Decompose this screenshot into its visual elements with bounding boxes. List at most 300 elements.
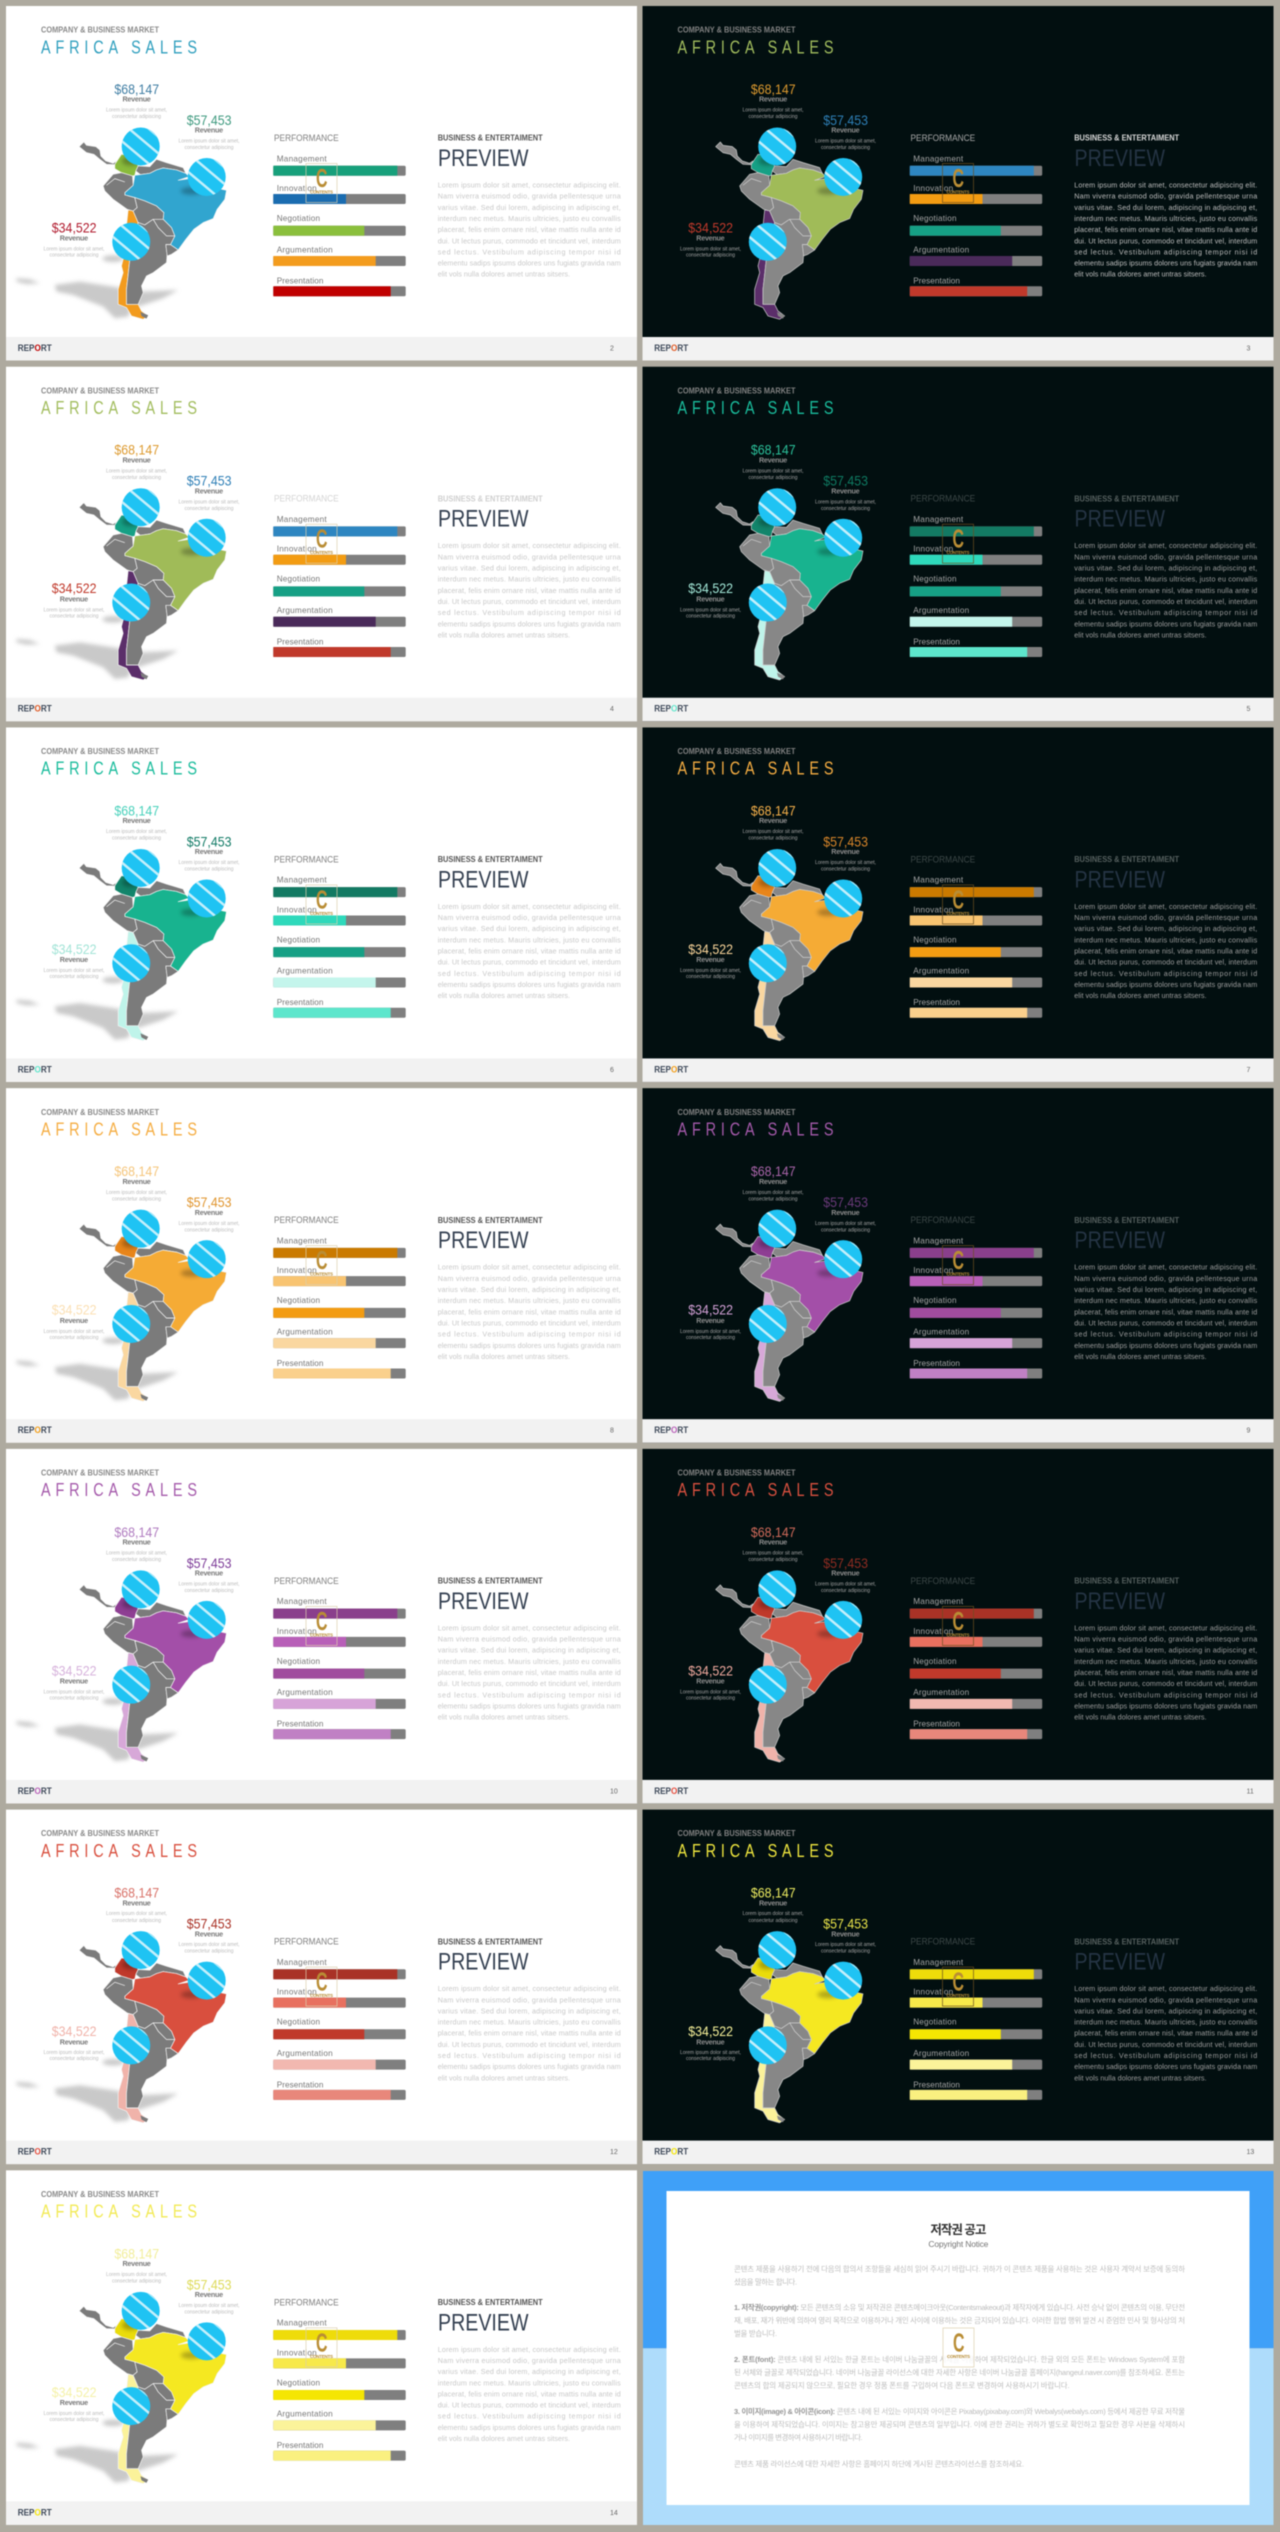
body text: varius vitae. Sed dui lorem, adipiscing in adipiscing et, <box>1074 924 1257 933</box>
stat 68,147: $68,147 <box>114 81 159 97</box>
white card <box>666 2191 1250 2505</box>
bar chart: Argumentation <box>277 2049 333 2058</box>
bar chart <box>273 154 406 296</box>
stat 57,453: Lorem ipsum dolor sit amet, <box>178 860 240 866</box>
stat 34,522: Lorem ipsum dolor sit amet, <box>680 2050 741 2056</box>
stat 68,147: Lorem ipsum dolor sit amet, <box>742 1911 804 1917</box>
copyright subtitle: Copyright Notice <box>928 2239 989 2249</box>
stat 57,453: $57,453 <box>187 1194 232 1210</box>
title: AFRICA SALES <box>41 2201 197 2222</box>
section heading: BUSINESS & ENTERTAIMENT <box>1074 133 1179 143</box>
stat 57,453 <box>815 1555 876 1594</box>
body text: varius vitae. Sed dui lorem, adipiscing in adipiscing et, <box>438 564 621 573</box>
body text: varius vitae. Sed dui lorem, adipiscing in adipiscing et, <box>438 2367 621 2376</box>
body text: sed lectus. Vestibulum adipiscing tempor nisi id <box>438 969 621 978</box>
stat 34,522: $34,522 <box>52 220 97 236</box>
stat 57,453: Lorem ipsum dolor sit amet, <box>815 1221 876 1227</box>
watermark <box>942 1245 974 1285</box>
bar chart: Innovation <box>277 2348 317 2357</box>
stat 34,522: consectetur adipiscing <box>50 2056 99 2062</box>
body text: sed lectus. Vestibulum adipiscing tempor nisi id <box>438 2412 621 2421</box>
stat 57,453: Revenue <box>195 847 223 856</box>
stat 34,522: Revenue <box>60 2037 88 2046</box>
watermark: C <box>952 163 964 193</box>
map shadow <box>16 616 178 679</box>
body text: dui. Ut lectus purus, commodo et tincidunt vel, interdum <box>438 2401 621 2410</box>
footer text <box>18 703 614 714</box>
body text: elit vols nulla dolores amet untras sitsers. <box>438 1713 570 1722</box>
bar chart: Innovation <box>277 1627 317 1636</box>
bar chart: Management <box>277 2319 327 2328</box>
preview heading: PREVIEW <box>1074 1588 1165 1615</box>
kicker: COMPANY & BUSINESS MARKET <box>678 385 796 395</box>
footer text: REPORT <box>18 2507 52 2517</box>
stat 57,453: $57,453 <box>823 473 868 489</box>
body text: elit vols nulla dolores amet untras sitsers. <box>438 270 570 279</box>
watermark: CONTENTS <box>310 190 333 194</box>
bar chart: Negotiation <box>277 575 320 584</box>
stat 68,147: Lorem ipsum dolor sit amet, <box>742 108 804 114</box>
body text: placerat, felis enim ornare nisl, vitae mattis nulla ante id <box>1074 586 1257 595</box>
bar chart: Innovation <box>913 545 954 554</box>
stat 57,453 <box>815 112 876 151</box>
body text: Lorem ipsum dolor sit amet, consectetur adipiscing elit. <box>438 902 621 911</box>
title: AFRICA SALES <box>677 1119 833 1140</box>
bar chart: Management <box>913 1958 964 1967</box>
body text: dui. Ut lectus purus, commodo et tincidunt vel, interdum <box>438 236 621 245</box>
title: AFRICA SALES <box>41 1840 197 1861</box>
bar chart <box>273 1236 406 1378</box>
body text: varius vitae. Sed dui lorem, adipiscing in adipiscing et, <box>1074 203 1257 212</box>
body text: sed lectus. Vestibulum adipiscing tempor nisi id <box>438 608 621 617</box>
body text: elit vols nulla dolores amet untras sitsers. <box>438 630 570 639</box>
body text: Lorem ipsum dolor sit amet, consectetur adipiscing elit. <box>438 1263 621 1272</box>
body text: interdum nec metus. Mauris ultricies, justo eu convallis <box>1074 214 1258 223</box>
footer text <box>654 1425 1250 1435</box>
marker circles <box>743 462 868 651</box>
stat 34,522: Revenue <box>696 594 725 603</box>
body text: varius vitae. Sed dui lorem, adipiscing in adipiscing et, <box>438 1646 621 1655</box>
footer bar <box>6 1780 637 1803</box>
watermark: CONTENTS <box>946 190 970 194</box>
stat 57,453 <box>178 1194 240 1233</box>
body text: varius vitae. Sed dui lorem, adipiscing in adipiscing et, <box>1074 1646 1257 1655</box>
bar chart: Management <box>913 1236 964 1245</box>
stat 34,522 <box>44 2384 104 2423</box>
footer text: 8 <box>610 1428 614 1435</box>
title: AFRICA SALES <box>41 397 197 418</box>
body text: interdum nec metus. Mauris ultricies, justo eu convallis <box>438 1296 621 1305</box>
stat 34,522: $34,522 <box>52 581 97 596</box>
watermark: CONTENTS <box>946 550 970 555</box>
body text: Nam viverra euismod odio, gravida pellentesque urna <box>438 192 621 201</box>
body text: Lorem ipsum dolor sit amet, consectetur adipiscing elit. <box>438 1623 621 1632</box>
body text: varius vitae. Sed dui lorem, adipiscing in adipiscing et, <box>438 2006 621 2015</box>
footer text: REPORT <box>18 1064 52 1075</box>
stat 68,147: consectetur adipiscing <box>112 2279 161 2285</box>
bar chart: Negotiation <box>913 214 957 223</box>
stat 57,453: $57,453 <box>823 834 868 850</box>
performance heading: PERFORMANCE <box>274 854 339 864</box>
stat 57,453: Lorem ipsum dolor sit amet, <box>178 139 240 145</box>
watermark: C <box>316 1967 328 1997</box>
stat 57,453: Revenue <box>831 486 860 495</box>
stat 68,147: $68,147 <box>751 1885 796 1901</box>
bar chart: Innovation <box>913 184 954 193</box>
bar chart: Negotiation <box>277 2378 320 2387</box>
watermark: CONTENTS <box>946 1632 970 1637</box>
body text: elit vols nulla dolores amet untras sitsers. <box>1074 2073 1206 2082</box>
bar chart <box>273 1958 406 2100</box>
kicker: COMPANY & BUSINESS MARKET <box>678 1467 796 1477</box>
stat 34,522: $34,522 <box>52 1302 97 1318</box>
stat 34,522: Lorem ipsum dolor sit amet, <box>680 247 741 253</box>
stat 68,147: Lorem ipsum dolor sit amet, <box>742 468 804 474</box>
body text: Lorem ipsum dolor sit amet, consectetur adipiscing elit. <box>438 541 621 550</box>
performance heading: PERFORMANCE <box>910 854 975 864</box>
footer text: 6 <box>610 1067 614 1074</box>
stat 34,522: Lorem ipsum dolor sit amet, <box>44 1689 104 1695</box>
body text: sed lectus. Vestibulum adipiscing tempor nisi id <box>1074 2051 1257 2060</box>
stat 34,522: Revenue <box>60 594 88 603</box>
body text: dui. Ut lectus purus, commodo et tincidunt vel, interdum <box>438 597 621 606</box>
bar chart <box>910 515 1042 657</box>
body text: placerat, felis enim ornare nisl, vitae mattis nulla ante id <box>438 2389 621 2398</box>
body text: elementu sadips ipsums dolores uns fugiats gravida nam <box>438 1341 621 1350</box>
marker circles <box>106 2266 232 2454</box>
stat 57,453: $57,453 <box>187 2277 232 2292</box>
stat 34,522: consectetur adipiscing <box>686 2056 735 2062</box>
watermark: CONTENTS <box>947 2354 970 2359</box>
stat 68,147: consectetur adipiscing <box>748 114 798 120</box>
clause 1: 재, 배포, 재가 위반에 의하여 영리 목적으로 이용하거나 개인 사이에 이용하는 것은 금지되어 있습니다. 이러한 합법 행위 발견 시 준엄한 민사 및 형사상의 처 <box>734 2316 1185 2325</box>
map <box>716 503 863 680</box>
stat 68,147: Lorem ipsum dolor sit amet, <box>742 829 804 835</box>
bar chart: Negotiation <box>913 2018 957 2027</box>
map <box>79 1224 226 1401</box>
stat 57,453: Lorem ipsum dolor sit amet, <box>815 860 876 866</box>
bar chart: Innovation <box>277 545 317 554</box>
stat 68,147 <box>106 1163 167 1202</box>
stat 57,453: $57,453 <box>823 1194 868 1210</box>
stat 34,522: Lorem ipsum dolor sit amet, <box>44 2411 104 2417</box>
bar chart: Negotiation <box>913 575 957 584</box>
body text: sed lectus. Vestibulum adipiscing tempor nisi id <box>1074 247 1257 256</box>
watermark: CONTENTS <box>310 1632 333 1637</box>
title: AFRICA SALES <box>677 397 833 418</box>
body text <box>438 541 621 639</box>
stat 57,453: consectetur adipiscing <box>184 145 234 151</box>
marker circles <box>743 823 868 1011</box>
stat 34,522 <box>44 220 104 259</box>
body text: dui. Ut lectus purus, commodo et tincidunt vel, interdum <box>438 1679 621 1688</box>
watermark: C <box>316 1245 328 1275</box>
stat 68,147: $68,147 <box>751 1524 796 1540</box>
stat 34,522 <box>680 2023 741 2062</box>
bar chart <box>910 1236 1042 1378</box>
blue background top <box>643 2171 1274 2348</box>
footer bar <box>642 1780 1274 1803</box>
section heading: BUSINESS & ENTERTAIMENT <box>438 1215 543 1225</box>
body text: interdum nec metus. Mauris ultricies, justo eu convallis <box>1074 1657 1258 1666</box>
body text: Lorem ipsum dolor sit amet, consectetur adipiscing elit. <box>1074 1263 1257 1272</box>
footer text: 9 <box>1246 1428 1250 1435</box>
slide background <box>642 1810 1274 2164</box>
body text <box>438 1984 621 2082</box>
body text: elementu sadips ipsums dolores uns fugiats gravida nam <box>1074 1341 1257 1350</box>
bar chart: Management <box>277 154 327 163</box>
stat 68,147: consectetur adipiscing <box>748 1196 798 1202</box>
body text: placerat, felis enim ornare nisl, vitae mattis nulla ante id <box>438 225 621 234</box>
stat 34,522: Lorem ipsum dolor sit amet, <box>680 1689 741 1695</box>
title: AFRICA SALES <box>677 1479 833 1501</box>
stat 68,147: Revenue <box>122 816 151 825</box>
performance heading: PERFORMANCE <box>274 1937 339 1947</box>
body text <box>438 2345 621 2443</box>
stat 68,147: Revenue <box>122 1898 151 1907</box>
stat 34,522: Revenue <box>696 955 725 964</box>
map <box>79 142 226 319</box>
bar chart: Management <box>913 876 964 885</box>
bar chart: Negotiation <box>277 214 320 223</box>
stat 68,147 <box>106 803 167 842</box>
stat 68,147: Revenue <box>122 1177 151 1186</box>
map <box>716 142 863 319</box>
stat 34,522: Lorem ipsum dolor sit amet, <box>680 968 741 974</box>
stat 57,453: consectetur adipiscing <box>184 2309 234 2315</box>
stat 68,147: $68,147 <box>114 1524 159 1540</box>
slide 10 <box>6 1449 637 1803</box>
body text: elementu sadips ipsums dolores uns fugiats gravida nam <box>438 259 621 268</box>
stat 57,453 <box>178 112 240 151</box>
bar chart: Argumentation <box>277 1688 333 1697</box>
slide background <box>6 2170 637 2525</box>
body text <box>1074 1984 1258 2082</box>
bar chart: Argumentation <box>277 1327 333 1336</box>
stat 57,453: Lorem ipsum dolor sit amet, <box>178 1581 240 1587</box>
kicker: COMPANY & BUSINESS MARKET <box>41 1107 160 1117</box>
preview heading: PREVIEW <box>438 506 529 533</box>
kicker: COMPANY & BUSINESS MARKET <box>41 1467 160 1477</box>
map <box>79 1585 226 1762</box>
footer text: REPORT <box>18 1425 52 1435</box>
stat 57,453 <box>815 1916 876 1955</box>
preview heading: PREVIEW <box>1074 506 1165 533</box>
stat 57,453: $57,453 <box>187 473 232 489</box>
footer bar <box>6 1419 637 1443</box>
map <box>716 1946 863 2123</box>
stat 34,522: Lorem ipsum dolor sit amet, <box>44 1329 104 1335</box>
watermark <box>942 1606 974 1645</box>
body text: elit vols nulla dolores amet untras sitsers. <box>1074 270 1206 279</box>
stat 34,522: consectetur adipiscing <box>686 974 735 980</box>
footer text: 5 <box>1246 706 1250 713</box>
watermark <box>943 2328 974 2367</box>
kicker: COMPANY & BUSINESS MARKET <box>41 25 160 35</box>
stat 34,522: $34,522 <box>688 1302 733 1318</box>
map <box>716 1585 863 1762</box>
bar chart <box>273 2319 406 2461</box>
bar chart: Argumentation <box>913 2049 970 2058</box>
slide background <box>642 367 1274 721</box>
stat 34,522: consectetur adipiscing <box>686 1335 735 1341</box>
pale blue background bottom <box>643 2348 1274 2525</box>
slide 6 <box>6 727 637 1082</box>
title: AFRICA SALES <box>41 1479 197 1501</box>
watermark: C <box>316 163 328 193</box>
map <box>716 863 863 1041</box>
footer text: REPORT <box>654 1425 689 1435</box>
stat 68,147: Revenue <box>759 816 787 825</box>
watermark: C <box>952 884 964 914</box>
bar chart: Management <box>277 1236 327 1245</box>
body text: varius vitae. Sed dui lorem, adipiscing in adipiscing et, <box>1074 2006 1257 2015</box>
footer text <box>654 2146 1254 2157</box>
body text <box>438 1263 621 1361</box>
preview heading: PREVIEW <box>1074 145 1165 172</box>
stat 68,147 <box>742 1885 804 1924</box>
map <box>716 1224 863 1401</box>
closing note: 콘텐츠 제품 라이선스에 대한 자세한 사항은 홈페이지 하단에 게시된 콘텐츠라이선스를 참조하세요. <box>734 2459 1024 2468</box>
title: AFRICA SALES <box>677 1840 833 1861</box>
footer bar <box>6 2141 637 2164</box>
stat 68,147: Lorem ipsum dolor sit amet, <box>106 2272 167 2278</box>
body text: placerat, felis enim ornare nisl, vitae mattis nulla ante id <box>438 586 621 595</box>
bar chart: Negotiation <box>913 1657 957 1666</box>
stat 68,147: Revenue <box>122 1538 151 1547</box>
body text: elementu sadips ipsums dolores uns fugiats gravida nam <box>438 619 621 628</box>
clause 1 <box>734 2303 1185 2338</box>
watermark <box>306 1606 337 1645</box>
section heading: BUSINESS & ENTERTAIMENT <box>438 1936 543 1946</box>
watermark <box>306 1245 337 1285</box>
body text: interdum nec metus. Mauris ultricies, justo eu convallis <box>438 935 621 944</box>
stat 68,147: consectetur adipiscing <box>112 836 161 842</box>
bar chart: Innovation <box>913 1627 954 1636</box>
slide background <box>6 1810 637 2164</box>
preview heading: PREVIEW <box>438 1227 529 1254</box>
performance heading: PERFORMANCE <box>274 1215 339 1225</box>
watermark <box>306 524 337 563</box>
stat 57,453: Revenue <box>195 1208 223 1217</box>
stat 57,453: Revenue <box>831 1569 860 1578</box>
bar chart: Innovation <box>913 905 954 914</box>
stat 68,147 <box>742 1163 804 1202</box>
body text: dui. Ut lectus purus, commodo et tincidunt vel, interdum <box>438 1318 621 1327</box>
performance heading: PERFORMANCE <box>910 494 975 504</box>
slide background <box>642 1088 1274 1443</box>
slide 12 <box>6 1810 637 2164</box>
watermark: CONTENTS <box>946 1993 970 1998</box>
body text: Lorem ipsum dolor sit amet, consectetur adipiscing elit. <box>438 1984 621 1993</box>
slide 2 <box>6 6 637 360</box>
stat 57,453: consectetur adipiscing <box>184 506 234 512</box>
intro paragraph: 콘텐츠 제품을 사용하기 전에 다음의 합의서 조항들을 세심히 읽어 주시기 바랍니다. 귀하가 이 콘텐츠 제품을 사용하는 것은 사용자 계약서 보증에 동의하 <box>734 2264 1185 2273</box>
footer text: REPORT <box>654 342 689 353</box>
bar chart: Presentation <box>277 2080 324 2089</box>
slide 3 <box>642 6 1274 360</box>
body text: placerat, felis enim ornare nisl, vitae mattis nulla ante id <box>1074 1307 1257 1316</box>
clause 2 <box>734 2355 1185 2390</box>
preview heading: PREVIEW <box>1074 1227 1165 1254</box>
preview heading: PREVIEW <box>438 1588 529 1615</box>
stat 34,522 <box>44 1663 104 1701</box>
stat 57,453 <box>815 473 876 512</box>
body text: Lorem ipsum dolor sit amet, consectetur adipiscing elit. <box>438 180 621 190</box>
stat 57,453: $57,453 <box>823 1916 868 1932</box>
stat 68,147: $68,147 <box>751 81 796 97</box>
stat 57,453: Revenue <box>831 847 860 856</box>
stat 34,522: $34,522 <box>688 941 733 957</box>
footer text <box>18 2507 618 2517</box>
marker circles <box>743 102 868 290</box>
stat 68,147: Revenue <box>122 455 151 464</box>
title: AFRICA SALES <box>41 37 197 58</box>
footer text: 10 <box>610 1788 618 1795</box>
body text <box>438 180 621 279</box>
stat 57,453: consectetur adipiscing <box>821 867 870 873</box>
bar chart <box>910 154 1042 296</box>
slide 8 <box>6 1088 637 1443</box>
body text: interdum nec metus. Mauris ultricies, justo eu convallis <box>1074 575 1258 584</box>
bar chart: Innovation <box>913 1988 954 1997</box>
stat 68,147: Revenue <box>122 2259 151 2268</box>
body text: Lorem ipsum dolor sit amet, consectetur adipiscing elit. <box>1074 1984 1257 1993</box>
stat 34,522: $34,522 <box>52 1663 97 1679</box>
stat 57,453: Lorem ipsum dolor sit amet, <box>815 139 876 145</box>
stat 57,453: consectetur adipiscing <box>184 1588 234 1594</box>
body text: placerat, felis enim ornare nisl, vitae mattis nulla ante id <box>1074 947 1257 956</box>
bar chart: Presentation <box>277 1720 324 1729</box>
slide 9 <box>642 1088 1274 1443</box>
stat 57,453: Revenue <box>195 2290 223 2299</box>
footer text <box>654 703 1250 714</box>
stat 68,147 <box>106 81 167 120</box>
body text: interdum nec metus. Mauris ultricies, justo eu convallis <box>1074 2018 1258 2027</box>
preview heading: PREVIEW <box>438 2309 529 2336</box>
bar chart: Negotiation <box>913 935 957 944</box>
watermark: C <box>316 524 328 554</box>
body text: varius vitae. Sed dui lorem, adipiscing in adipiscing et, <box>438 1285 621 1294</box>
stat 68,147: Lorem ipsum dolor sit amet, <box>742 1550 804 1556</box>
stat 68,147: $68,147 <box>751 442 796 458</box>
performance heading: PERFORMANCE <box>274 2297 339 2307</box>
bar chart: Management <box>913 515 964 524</box>
watermark: C <box>952 1967 964 1997</box>
body text: Nam viverra euismod odio, gravida pellentesque urna <box>1074 192 1257 201</box>
clause 2: 2. 폰트(font): 콘텐츠 내에 된 서있는 한글 폰트는 네이버 나눔글꼴의 서체를 이용하여 제작되었습니다. 한글 외의 모든 폰트는 Windows System에 포함 <box>734 2355 1185 2364</box>
stat 68,147: consectetur adipiscing <box>112 1557 161 1563</box>
section heading: BUSINESS & ENTERTAIMENT <box>1074 1576 1179 1586</box>
stat 68,147: consectetur adipiscing <box>748 1918 798 1924</box>
kicker: COMPANY & BUSINESS MARKET <box>41 385 160 395</box>
body text: interdum nec metus. Mauris ultricies, justo eu convallis <box>438 575 621 584</box>
footer bar <box>642 698 1274 721</box>
body text: interdum nec metus. Mauris ultricies, justo eu convallis <box>1074 935 1258 944</box>
map <box>79 1946 226 2123</box>
watermark: CONTENTS <box>310 911 333 916</box>
stat 57,453: Lorem ipsum dolor sit amet, <box>178 499 240 505</box>
slide background <box>642 1449 1274 1803</box>
footer text <box>654 1785 1254 1796</box>
map <box>79 2306 226 2484</box>
footer text: 13 <box>1246 2149 1254 2156</box>
map shadow <box>16 977 178 1040</box>
body text: elementu sadips ipsums dolores uns fugiats gravida nam <box>438 980 621 989</box>
bar chart: Presentation <box>913 2080 960 2089</box>
marker circles <box>106 102 232 290</box>
title: AFRICA SALES <box>677 758 833 779</box>
